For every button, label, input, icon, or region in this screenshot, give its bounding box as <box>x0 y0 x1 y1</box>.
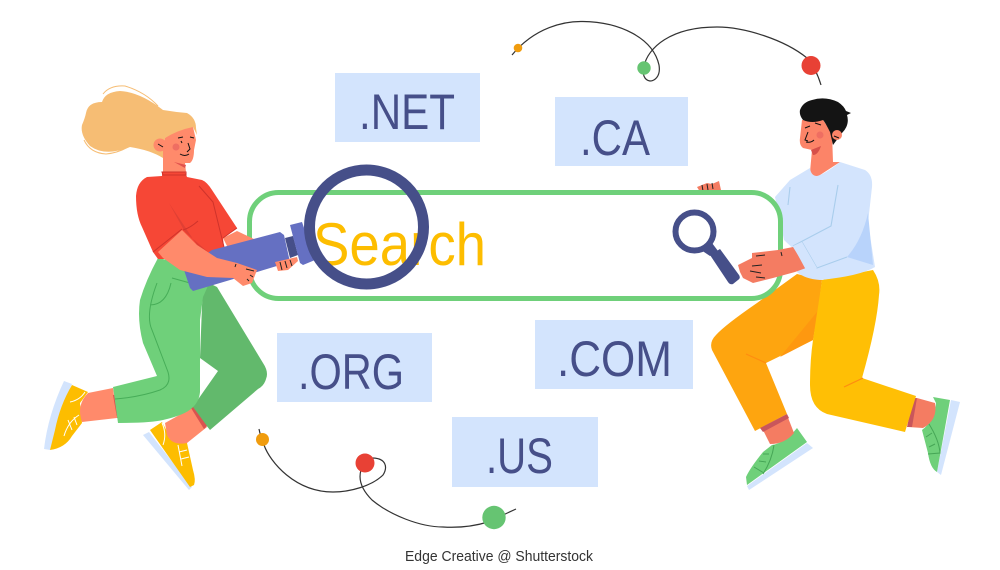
woman: near arm <box>158 230 257 286</box>
man: ankle cuff <box>907 398 917 427</box>
domain tag: .US: .US <box>486 428 553 484</box>
woman: front trouser leg <box>113 258 215 423</box>
man: sweater seams <box>788 185 847 268</box>
woman: back cuff <box>191 407 207 429</box>
woman: back trouser leg <box>192 280 267 430</box>
man: back trouser leg <box>711 274 822 431</box>
woman: shirt shadow and seams <box>153 172 237 258</box>
man: back shoe <box>746 428 813 490</box>
man: hair <box>800 98 851 145</box>
man: facial features <box>805 123 839 155</box>
man: back foot <box>762 415 794 444</box>
domain tag: .NET <box>335 73 480 142</box>
man: forearm and hand over the bar <box>738 242 817 283</box>
domain tag: .ORG <box>277 333 432 402</box>
woman: shirt <box>136 172 237 259</box>
bottom dotted curve <box>256 429 516 529</box>
man: sweater <box>790 162 875 280</box>
woman: front foot <box>80 388 117 422</box>
domain tag: .COM: .COM <box>557 331 672 387</box>
man: front foot <box>908 398 936 428</box>
domain tag: .US <box>452 417 598 487</box>
domain tag: .COM <box>535 320 693 389</box>
woman: near hand <box>275 257 298 271</box>
domain tag: .CA: .CA <box>580 110 651 166</box>
man character <box>711 98 960 490</box>
man: trouser folds <box>746 354 863 387</box>
large magnifier ring <box>310 170 424 284</box>
woman: trouser seams <box>115 278 190 399</box>
woman: front cuff <box>113 395 119 418</box>
credit line: Edge Creative @ Shutterstock <box>405 549 594 565</box>
man: front trouser leg <box>810 270 916 432</box>
woman: back foot shoe <box>143 422 195 490</box>
search bar <box>250 192 780 298</box>
man: trouser shade <box>780 312 817 357</box>
top dotted curve <box>512 21 821 85</box>
woman character <box>44 86 315 490</box>
woman: facial features <box>158 137 194 156</box>
flashlight <box>184 222 315 291</box>
man: far sleeve <box>775 180 800 255</box>
man: ear <box>832 130 842 140</box>
man's hand behind search bar <box>697 181 724 195</box>
man: neck and face <box>800 120 840 177</box>
search text: Search <box>313 211 486 278</box>
woman: back foot <box>165 408 207 444</box>
domain tag: .CA <box>555 97 688 166</box>
man: sweater shadow <box>847 213 873 265</box>
woman: front foot shoe <box>44 381 88 450</box>
man: front shoe <box>922 397 960 475</box>
woman: hair <box>82 86 197 158</box>
woman: far arm <box>223 231 256 252</box>
man: back cuff <box>760 414 789 432</box>
woman: neck and face <box>154 127 196 172</box>
domain tag: .NET: .NET <box>359 84 455 140</box>
domain tag: .ORG: .ORG <box>298 344 404 400</box>
small magnifier icon <box>676 212 740 284</box>
